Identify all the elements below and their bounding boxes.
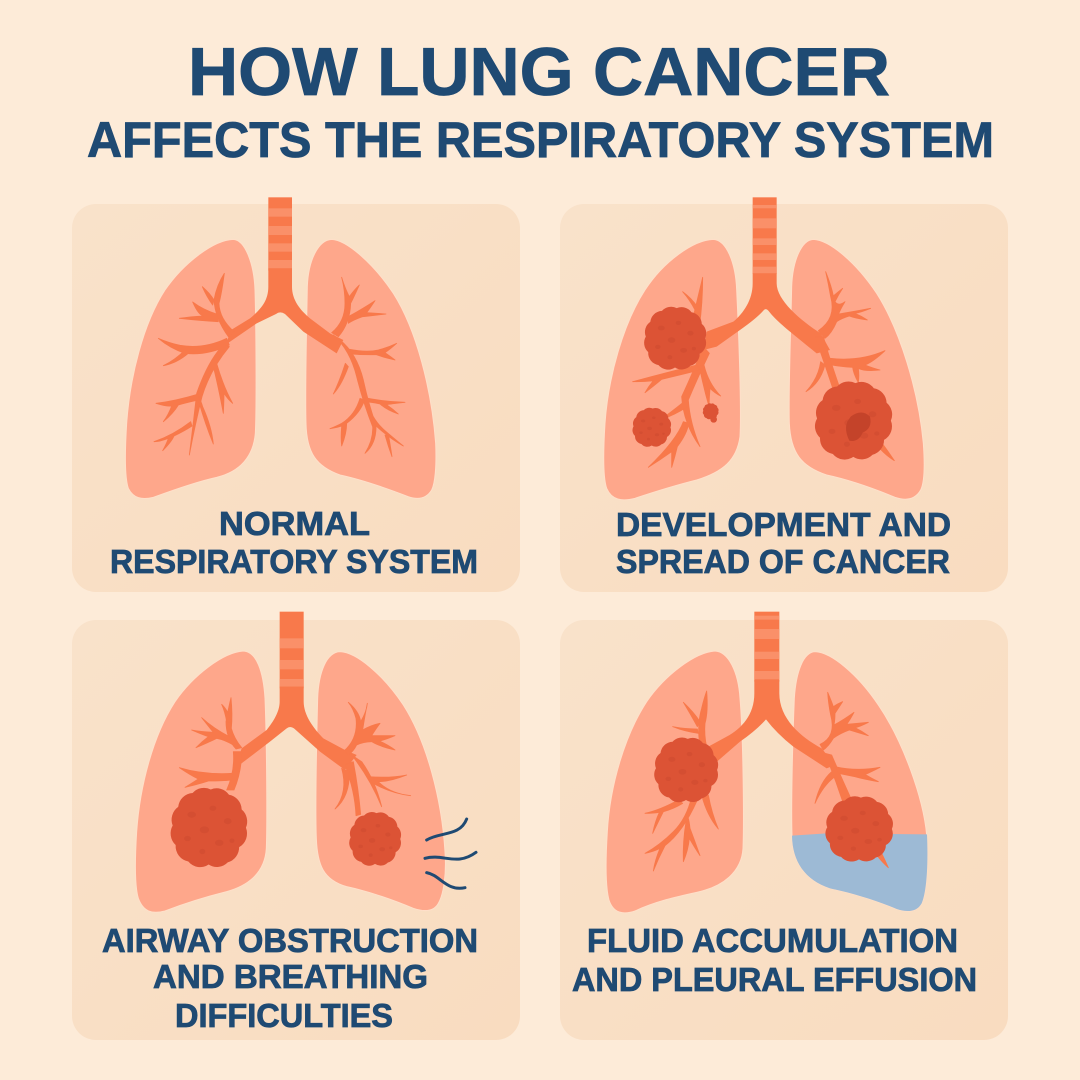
panel background: [560, 204, 1008, 592]
panel background: [72, 620, 520, 1040]
panel: airway obstruction: [72, 612, 520, 1040]
tumor: small left: [703, 403, 719, 419]
label: fluid accumulation: FLUID ACCUMULATION: [587, 922, 958, 959]
label: development and spread: DEVELOPMENT AND: [616, 506, 951, 543]
panel: fluid accumulation: [560, 612, 1008, 1040]
panel background: [560, 620, 1008, 1040]
panel background: [72, 204, 520, 592]
tumor: large right: [815, 381, 892, 460]
label: airway obstruction: AND BREATHING: [153, 958, 428, 995]
lungs illustration with obstruction: [135, 612, 476, 912]
label: airway obstruction: [102, 922, 478, 1034]
label: normal respiratory system: [110, 505, 478, 580]
tumor: left: [654, 738, 718, 802]
label: airway obstruction: AIRWAY OBSTRUCTION: [102, 922, 478, 959]
tumor: right: [349, 812, 401, 866]
tumor: left: [171, 788, 247, 867]
icon: breathing waves: [425, 819, 476, 888]
label: normal respiratory system: RESPIRATORY SYSTEM: [110, 543, 478, 580]
title line 1: HOW LUNG CANCER: [188, 34, 890, 110]
label: development and spread: SPREAD OF CANCER: [616, 543, 950, 580]
title: [87, 34, 994, 168]
label: fluid accumulation: AND PLEURAL EFFUSION: [572, 961, 977, 998]
tumor: upper left: [644, 307, 706, 370]
label: airway obstruction: DIFFICULTIES: [175, 997, 393, 1034]
lungs illustration: [125, 197, 436, 498]
tumor: lower left: [632, 408, 671, 447]
title line 2: AFFECTS THE RESPIRATORY SYSTEM: [87, 112, 994, 168]
label: development and spread: [616, 506, 951, 580]
label: normal respiratory system: NORMAL: [219, 505, 370, 542]
tumor: right: [825, 796, 893, 862]
tumor core: [846, 412, 871, 441]
lungs illustration with tumors: [604, 197, 924, 500]
fluid: [792, 833, 927, 911]
lungs illustration with effusion: [606, 612, 927, 913]
panel: normal respiratory system: [72, 197, 520, 592]
label: fluid accumulation: [572, 922, 977, 998]
panel: development and spread of cancer: [560, 197, 1008, 592]
